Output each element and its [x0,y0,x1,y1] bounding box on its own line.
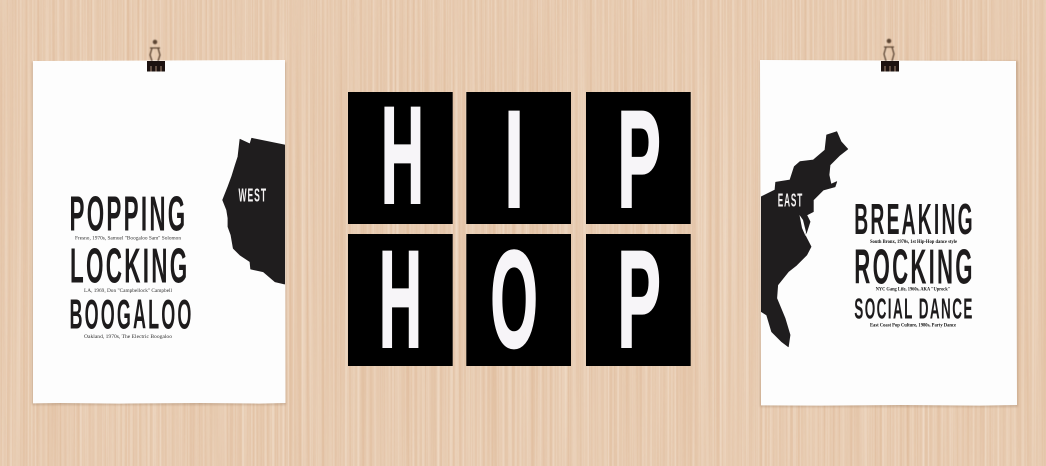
panel: east poster: EAST [778,191,803,211]
map: east coast [761,132,848,347]
panel: east poster [760,60,1018,407]
panel: west poster [32,60,286,405]
tile: H [348,78,453,233]
tile: H: H [381,78,424,233]
panel: hip hop tiles [348,78,691,377]
panel: west poster: LOCKING [70,239,190,294]
caption: boogaloo: Oakland, 1970s, The Electric Boogaloo [84,334,172,340]
tile: P: P [618,221,661,376]
panel: west poster: WEST [238,186,267,206]
caption: rocking: NYC Gang Life, 1960s, AKA "Uprock" [876,286,950,292]
panel: west poster: BOOGALOO [70,291,194,338]
caption: popping: Fresno, 1970s, Samuel "Boogaloo Sam" Solomon [75,236,181,242]
tile: I [466,83,571,237]
tile: P [586,81,691,236]
map: west coast [223,138,285,284]
caption: breaking: South Bronx, 1970s, 1st Hip-Hop dance style [870,239,957,245]
tile: H: H [379,222,422,377]
tile: H [348,222,453,377]
tile: O [466,221,571,377]
icon: west binder clip [147,40,165,72]
caption: social dance: East Coast Pop Culture, 1980s, Party Dance [870,322,956,328]
tile: O: O [490,221,538,377]
poster sheet [33,60,286,404]
tile: I: I [504,83,524,237]
map: chesapeake bay [800,215,806,236]
caption: locking: LA, 1969, Don "Campbellock" Campbell [84,288,172,294]
tile: P [586,221,691,376]
poster sheet [760,60,1017,406]
panel: west poster: POPPING [70,187,188,242]
tile: P: P [618,81,661,236]
icon: east binder clip [881,39,899,72]
